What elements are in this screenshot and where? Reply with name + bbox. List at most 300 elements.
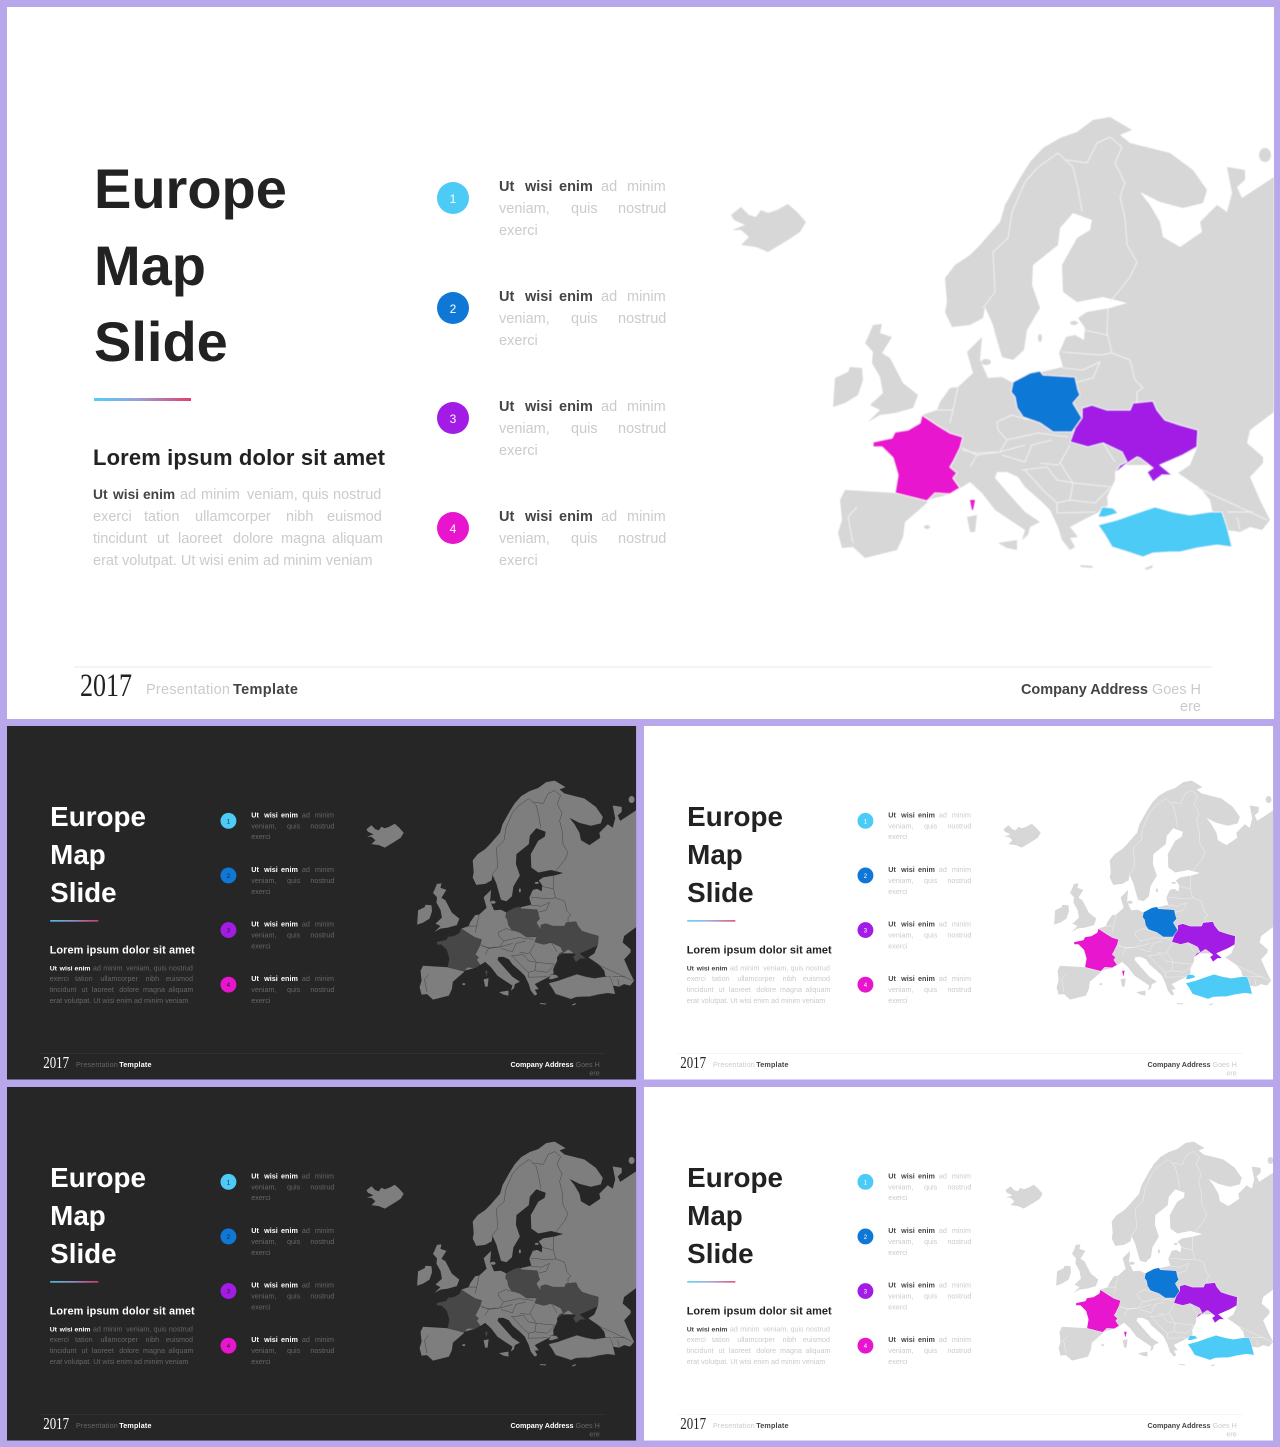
body paragraph: magna <box>780 1346 802 1355</box>
item 1 <box>437 179 666 239</box>
item 2: exerci <box>251 1248 271 1257</box>
body paragraph: erat volutpat. Ut wisi enim ad minim veniam <box>687 996 825 1005</box>
item 1: nostrud <box>618 201 666 217</box>
footer right: Company Address <box>510 1421 574 1430</box>
item 1: exerci <box>251 1193 271 1202</box>
item 4: ad <box>302 1335 310 1344</box>
item 2: enim <box>281 865 298 874</box>
item 3: enim <box>918 1281 935 1290</box>
item 2: minim <box>315 1226 334 1235</box>
body paragraph: dolore <box>119 1346 139 1355</box>
body paragraph: aliquam <box>805 985 831 994</box>
item 4: exerci <box>888 1357 908 1366</box>
item 3: exerci <box>888 1302 908 1311</box>
item 1: quis <box>287 821 301 830</box>
body paragraph: nostrud <box>333 487 381 503</box>
item 4: quis <box>571 531 598 547</box>
item 4: minim <box>952 1335 971 1344</box>
body paragraph: magna <box>780 985 802 994</box>
item 4: veniam, <box>888 985 913 994</box>
item 3: exerci <box>499 443 538 459</box>
item 4: Ut <box>888 974 896 983</box>
title: Map <box>94 234 206 297</box>
item 4: quis <box>924 1346 938 1355</box>
item 1: 1 <box>227 1180 231 1186</box>
title: Map <box>50 839 106 870</box>
footer right: Goes H <box>1212 1060 1237 1069</box>
item 2: Ut <box>499 289 514 305</box>
body paragraph: magna <box>281 531 326 547</box>
body paragraph: ullamcorper <box>100 974 138 983</box>
footer right: ere <box>589 1069 600 1078</box>
footer left: 2017 <box>43 1414 69 1433</box>
item 2: 2 <box>450 302 457 316</box>
body paragraph: erat volutpat. Ut wisi enim ad minim veniam <box>687 1357 825 1366</box>
body paragraph: minim <box>740 1324 759 1333</box>
title: Map <box>50 1200 106 1231</box>
item 2: Ut <box>888 1226 896 1235</box>
item 4: veniam, <box>251 1346 276 1355</box>
item 2: quis <box>287 876 301 885</box>
gradient underline <box>687 920 735 922</box>
body paragraph: minim <box>103 963 122 972</box>
body paragraph: dolore <box>756 985 776 994</box>
body paragraph: tincidunt <box>687 1346 713 1355</box>
item 2: minim <box>952 865 971 874</box>
title: Europe <box>94 157 287 220</box>
footer left: 2017 <box>80 668 132 704</box>
body paragraph: wisi <box>59 1326 73 1333</box>
item 1: nostrud <box>947 1182 971 1191</box>
body paragraph: exerci <box>50 1335 69 1344</box>
footer right: Goes H <box>1152 682 1201 698</box>
item 3: wisi <box>263 1281 278 1290</box>
item 1: wisi <box>263 810 278 819</box>
body paragraph: ut <box>718 985 724 994</box>
body paragraph: ad <box>180 487 196 503</box>
item 1: 1 <box>864 819 868 825</box>
body paragraph: nibh <box>146 974 159 983</box>
item 1: veniam, <box>251 1182 276 1191</box>
body paragraph: magna <box>143 1346 165 1355</box>
item 3: wisi <box>900 1281 915 1290</box>
item 2: Ut <box>251 1226 259 1235</box>
body paragraph: ut <box>718 1346 724 1355</box>
body paragraph: euismod <box>166 1335 193 1344</box>
item 1 <box>857 810 971 841</box>
body paragraph: nibh <box>286 509 313 525</box>
item 4: exerci <box>888 996 908 1005</box>
body paragraph: tincidunt <box>50 985 76 994</box>
item 1: Ut <box>251 810 259 819</box>
item 1 <box>857 1171 971 1202</box>
item 4: ad <box>302 974 310 983</box>
item 4: minim <box>315 974 334 983</box>
map of Europe <box>1005 1142 1275 1367</box>
item 2: nostrud <box>618 311 666 327</box>
item 4: minim <box>627 509 666 525</box>
item 4: enim <box>918 1335 935 1344</box>
item 3: veniam, <box>499 421 550 437</box>
item 1: veniam, <box>251 821 276 830</box>
item 3: wisi <box>524 399 552 415</box>
item 3: Ut <box>499 399 514 415</box>
item 1: Ut <box>888 810 896 819</box>
item 1: nostrud <box>310 821 334 830</box>
item 4: ad <box>601 509 617 525</box>
slide 2: small dark slide <box>7 726 636 1080</box>
item 1 <box>220 1171 334 1202</box>
body paragraph: nibh <box>146 1335 159 1344</box>
item 2: 2 <box>864 1235 867 1241</box>
item 4: wisi <box>900 974 915 983</box>
item 3: exerci <box>251 1302 271 1311</box>
item 2: Ut <box>888 865 896 874</box>
body paragraph: nostrud <box>169 1324 193 1333</box>
body paragraph: minim <box>740 963 759 972</box>
body paragraph: ad <box>730 963 738 972</box>
item 2: wisi <box>524 289 552 305</box>
item 3: veniam, <box>251 931 276 940</box>
body paragraph: tation <box>75 1335 93 1344</box>
footer left: Presentation <box>713 1060 755 1069</box>
item 1 <box>220 810 334 841</box>
item 2: wisi <box>900 1226 915 1235</box>
item 3: ad <box>601 399 617 415</box>
item 2: ad <box>939 865 947 874</box>
body paragraph: euismod <box>803 1335 830 1344</box>
item 1: Ut <box>499 179 514 195</box>
body paragraph: ullamcorper <box>737 1335 775 1344</box>
item 2 <box>220 865 334 896</box>
footer left: Template <box>119 1421 151 1430</box>
item 2: enim <box>559 289 593 305</box>
item 2: ad <box>302 1226 310 1235</box>
item 3: 3 <box>864 929 868 935</box>
body paragraph: exerci <box>687 974 706 983</box>
body paragraph: enim <box>712 1326 728 1333</box>
body paragraph: ad <box>730 1324 738 1333</box>
footer left: 2017 <box>43 1053 69 1072</box>
item 2: nostrud <box>947 876 971 885</box>
footer left: Presentation <box>76 1060 118 1069</box>
footer left: Presentation <box>76 1421 118 1430</box>
item 4: quis <box>287 1346 301 1355</box>
item 1: nostrud <box>947 821 971 830</box>
slide 3: small light slide <box>644 726 1273 1080</box>
item 1: 1 <box>227 819 231 825</box>
item 3: wisi <box>900 920 915 929</box>
gradient underline <box>50 1281 98 1283</box>
body paragraph: erat volutpat. Ut wisi enim ad minim veniam <box>93 553 373 569</box>
item 1: Ut <box>251 1171 259 1180</box>
item 3: quis <box>287 931 301 940</box>
item 2: enim <box>918 865 935 874</box>
body paragraph: laoreet <box>729 985 751 994</box>
footer left: 2017 <box>680 1414 706 1433</box>
body paragraph: nostrud <box>169 963 193 972</box>
item 2: nostrud <box>947 1237 971 1246</box>
body paragraph: ad <box>93 1324 101 1333</box>
item 3: nostrud <box>618 421 666 437</box>
body paragraph: veniam, <box>763 1324 788 1333</box>
subheading: Lorem ipsum dolor sit amet <box>50 1305 195 1317</box>
footer right: Company Address <box>1147 1421 1211 1430</box>
item 2: 2 <box>227 874 230 880</box>
item 4: exerci <box>251 1357 271 1366</box>
body paragraph: laoreet <box>178 531 222 547</box>
item 1: ad <box>939 810 947 819</box>
item 3: Ut <box>888 920 896 929</box>
body paragraph: enim <box>712 965 728 972</box>
body paragraph: dolore <box>119 985 139 994</box>
item 3: veniam, <box>888 1292 913 1301</box>
body paragraph: enim <box>143 487 175 502</box>
body paragraph: veniam, <box>247 487 298 503</box>
item 2: ad <box>601 289 617 305</box>
item 4: enim <box>281 974 298 983</box>
body paragraph: dolore <box>756 1346 776 1355</box>
item 3: enim <box>559 399 593 415</box>
item 2: minim <box>952 1226 971 1235</box>
item 1: Ut <box>888 1171 896 1180</box>
item 1: minim <box>627 179 666 195</box>
title: Map <box>687 1200 743 1231</box>
item 1: ad <box>302 810 310 819</box>
item 3: nostrud <box>947 1292 971 1301</box>
item 3: 3 <box>227 1290 231 1296</box>
body paragraph: tation <box>712 1335 730 1344</box>
item 2: veniam, <box>251 876 276 885</box>
item 1: minim <box>952 1171 971 1180</box>
item 4 <box>220 1335 334 1366</box>
body paragraph: ullamcorper <box>195 509 271 525</box>
item 3: Ut <box>251 1281 259 1290</box>
body paragraph: quis <box>790 1324 804 1333</box>
slide 1: large light slide <box>7 7 1274 719</box>
item 3: quis <box>571 421 598 437</box>
body paragraph: ullamcorper <box>100 1335 138 1344</box>
footer left <box>680 1414 788 1433</box>
item 2 <box>437 289 666 349</box>
item 3: Ut <box>251 920 259 929</box>
title: Slide <box>687 1238 754 1269</box>
footer right <box>1147 1421 1237 1439</box>
item 2: 2 <box>227 1235 230 1241</box>
item 1: ad <box>939 1171 947 1180</box>
subheading: Lorem ipsum dolor sit amet <box>687 944 832 956</box>
body paragraph: veniam, <box>126 963 151 972</box>
body paragraph: wisi <box>112 487 139 502</box>
body paragraph: Ut <box>687 965 695 972</box>
item 1: quis <box>924 821 938 830</box>
item 3: quis <box>924 931 938 940</box>
item 2: wisi <box>263 1226 278 1235</box>
item 4: ad <box>939 974 947 983</box>
item 1: veniam, <box>499 201 550 217</box>
body paragraph: nibh <box>783 1335 796 1344</box>
item 4: Ut <box>888 1335 896 1344</box>
body paragraph: exerci <box>50 974 69 983</box>
item 4: Ut <box>499 509 514 525</box>
item 4: wisi <box>263 974 278 983</box>
map of Europe <box>366 781 636 1006</box>
item 4: enim <box>559 509 593 525</box>
item 4: minim <box>315 1335 334 1344</box>
item 1: enim <box>918 1171 935 1180</box>
body paragraph: wisi <box>696 1326 710 1333</box>
body paragraph: euismod <box>803 974 830 983</box>
body paragraph: Ut <box>93 487 108 502</box>
subheading: Lorem ipsum dolor sit amet <box>93 445 386 470</box>
item 4: enim <box>281 1335 298 1344</box>
item 1: veniam, <box>888 821 913 830</box>
item 2: wisi <box>900 865 915 874</box>
item 3: nostrud <box>310 931 334 940</box>
item 3: exerci <box>888 941 908 950</box>
title: Map <box>687 839 743 870</box>
body paragraph: ut <box>157 531 169 547</box>
body paragraph: enim <box>75 965 91 972</box>
item 4: exerci <box>499 553 538 569</box>
body paragraph: minim <box>201 487 240 503</box>
item 3: exerci <box>251 941 271 950</box>
body paragraph: quis <box>790 963 804 972</box>
body paragraph: tation <box>144 509 179 525</box>
item 1: enim <box>281 1171 298 1180</box>
item 4: wisi <box>900 1335 915 1344</box>
footer left <box>680 1053 788 1072</box>
item 1: veniam, <box>888 1182 913 1191</box>
item 4 <box>857 974 971 1005</box>
item 2: veniam, <box>888 876 913 885</box>
item 2: quis <box>924 876 938 885</box>
footer right: Company Address <box>1021 682 1148 698</box>
item 2 <box>857 865 971 896</box>
item 3: minim <box>315 1281 334 1290</box>
item 1: minim <box>952 810 971 819</box>
item 3: enim <box>918 920 935 929</box>
footer right: Goes H <box>1212 1421 1237 1430</box>
slide 5: small light slide <box>644 1087 1275 1441</box>
item 2: wisi <box>263 865 278 874</box>
item 2: veniam, <box>251 1237 276 1246</box>
item 3: minim <box>952 920 971 929</box>
item 2 <box>220 1226 334 1257</box>
item 2: exerci <box>888 1248 908 1257</box>
footer right <box>510 1421 600 1439</box>
item 3: nostrud <box>310 1292 334 1301</box>
title: Slide <box>50 1238 117 1269</box>
item 3: veniam, <box>251 1292 276 1301</box>
body paragraph: quis <box>302 487 329 503</box>
item 1: minim <box>315 810 334 819</box>
item 3 <box>437 399 666 459</box>
footer left: 2017 <box>680 1053 706 1072</box>
item 3: wisi <box>263 920 278 929</box>
item 4: 4 <box>450 522 457 536</box>
item 1: minim <box>315 1171 334 1180</box>
item 4 <box>220 974 334 1005</box>
item 1: exerci <box>251 832 271 841</box>
item 2 <box>857 1226 971 1257</box>
subheading: Lorem ipsum dolor sit amet <box>50 944 195 956</box>
body paragraph: euismod <box>327 509 382 525</box>
item 3: enim <box>281 920 298 929</box>
body paragraph: aliquam <box>168 1346 194 1355</box>
body paragraph: laoreet <box>92 1346 114 1355</box>
body paragraph: quis <box>153 1324 167 1333</box>
item 4: veniam, <box>251 985 276 994</box>
footer right: Goes H <box>575 1421 600 1430</box>
item 2: minim <box>315 865 334 874</box>
item 1: enim <box>559 179 593 195</box>
body paragraph: wisi <box>59 965 73 972</box>
body paragraph: magna <box>143 985 165 994</box>
body paragraph: ut <box>81 985 87 994</box>
footer left: Template <box>233 682 298 698</box>
item 4 <box>437 509 666 569</box>
item 3: minim <box>627 399 666 415</box>
body paragraph: exerci <box>687 1335 706 1344</box>
item 3: ad <box>302 1281 310 1290</box>
item 4: 4 <box>227 1344 231 1350</box>
item 1: quis <box>924 1182 938 1191</box>
item 2: nostrud <box>310 876 334 885</box>
item 3 <box>857 920 971 950</box>
footer right: ere <box>1180 699 1201 715</box>
item 3: minim <box>315 920 334 929</box>
item 4: veniam, <box>499 531 550 547</box>
footer left: Template <box>756 1060 788 1069</box>
body paragraph: tation <box>75 974 93 983</box>
item 2: nostrud <box>310 1237 334 1246</box>
item 4: nostrud <box>310 1346 334 1355</box>
footer right: ere <box>1226 1430 1237 1439</box>
item 1: wisi <box>263 1171 278 1180</box>
body paragraph: enim <box>75 1326 91 1333</box>
footer left: Template <box>756 1421 788 1430</box>
item 3: enim <box>281 1281 298 1290</box>
title: Europe <box>50 801 146 832</box>
item 2: 2 <box>864 874 867 880</box>
item 2: quis <box>287 1237 301 1246</box>
footer left: Presentation <box>713 1421 755 1430</box>
item 3 <box>220 1281 334 1311</box>
footer right: Goes H <box>575 1060 600 1069</box>
item 1: quis <box>287 1182 301 1191</box>
footer right: ere <box>589 1430 600 1439</box>
footer right: Company Address <box>510 1060 574 1069</box>
title: Slide <box>94 310 228 373</box>
body paragraph: tation <box>712 974 730 983</box>
item 4: wisi <box>524 509 552 525</box>
item 3: 3 <box>450 412 457 426</box>
item 4: veniam, <box>888 1346 913 1355</box>
item 4: nostrud <box>618 531 666 547</box>
title: Slide <box>50 877 117 908</box>
item 3: veniam, <box>888 931 913 940</box>
item 4: Ut <box>251 1335 259 1344</box>
body paragraph: tincidunt <box>93 531 147 547</box>
body paragraph: quis <box>153 963 167 972</box>
item 3: quis <box>924 1292 938 1301</box>
item 4: wisi <box>263 1335 278 1344</box>
body paragraph: aliquam <box>332 531 383 547</box>
map of Europe <box>731 117 1274 570</box>
body paragraph: dolore <box>233 531 273 547</box>
item 4: quis <box>287 985 301 994</box>
